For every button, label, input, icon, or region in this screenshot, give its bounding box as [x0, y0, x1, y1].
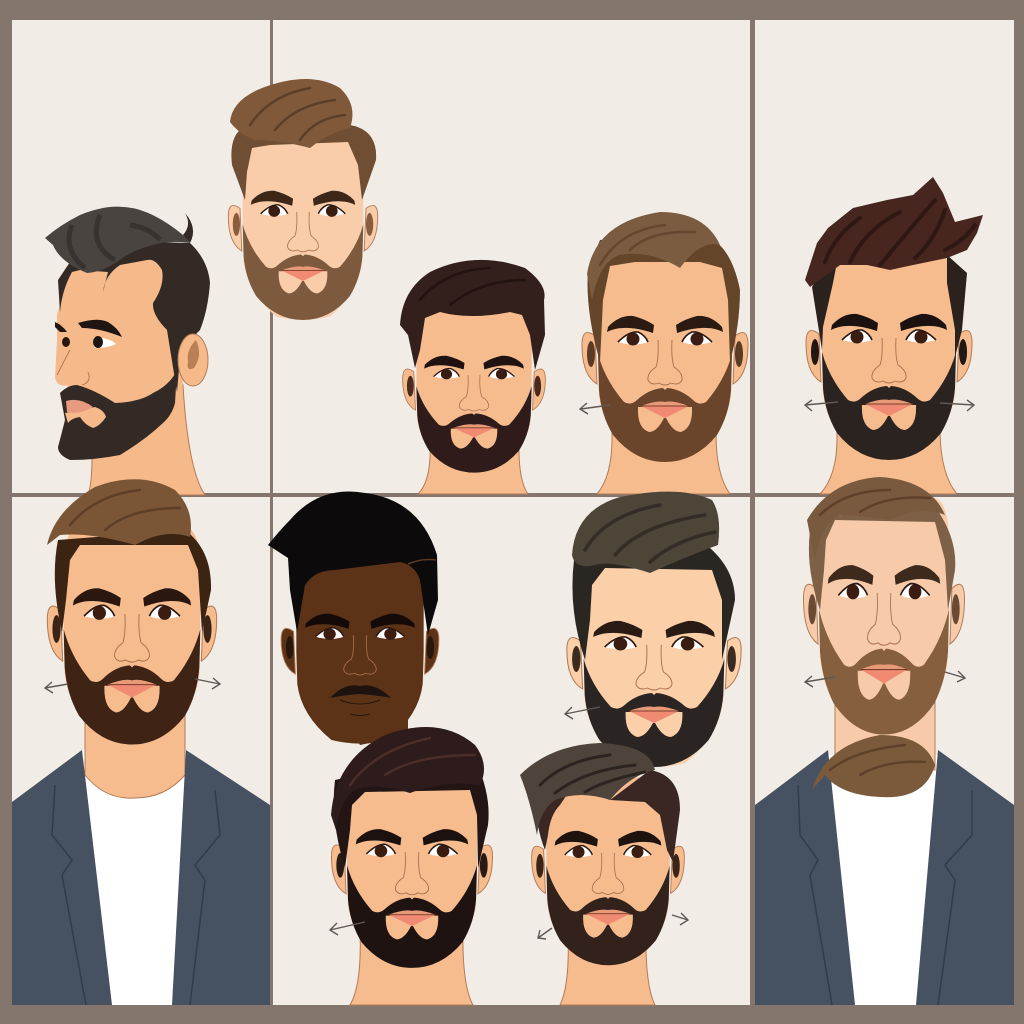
panel: bottom right: [755, 497, 1014, 1005]
hair swatch: [812, 735, 935, 797]
arrow: [565, 707, 600, 719]
hair: swept grey quiff: [572, 492, 719, 573]
hair: brown quiff: [230, 79, 352, 148]
arrows: [805, 400, 974, 411]
portrait: blazer with long brown beard: [755, 477, 1014, 1005]
hair: black voluminous: [268, 492, 438, 635]
blazer and shirt: [12, 715, 270, 1005]
portrait: man in blazer with brown hair and dark beard: [12, 479, 270, 1005]
portrait: dark skin with black hair and moustache: [268, 492, 439, 745]
hair: swept grey quiff: [45, 207, 193, 273]
hair: dark crop: [400, 260, 545, 370]
panel: bottom centre: [273, 497, 750, 1005]
portrait: striped grey hair with short beard and arrows: [520, 743, 688, 1005]
arrows: [45, 678, 220, 693]
portrait: short brown hair with tapered beard: [228, 79, 378, 320]
arrows: [538, 913, 688, 939]
hair: striped quiff: [520, 743, 655, 835]
blazer and shirt: [755, 700, 1014, 1005]
arrow: [580, 403, 610, 414]
ear: [178, 334, 208, 386]
panel: top right: [755, 20, 1014, 493]
hair: brown quiff: [587, 212, 720, 300]
portrait: profile with dark hair and full beard: [45, 207, 210, 495]
panel: top left: [12, 20, 270, 493]
hair: brown quiff: [47, 479, 191, 545]
panel: top centre: [273, 20, 750, 493]
arrow: [330, 922, 365, 935]
moustache: [330, 685, 391, 698]
hair: swept spikes: [805, 177, 983, 287]
portrait: grey quiff with dark beard and arrow: [565, 492, 741, 767]
portrait: dark hair with black full beard and arrow: [330, 727, 493, 1005]
portrait: dark hair with short beard: [400, 260, 545, 494]
portrait: brown hair with wide beard and arrow: [580, 212, 748, 494]
hair: dark quiff: [331, 727, 484, 830]
beard: [58, 370, 177, 460]
arrows: [805, 671, 965, 687]
portrait: spiked dark hair with black beard and arrows: [805, 177, 983, 494]
hair: swept brown: [807, 477, 945, 560]
panel: bottom left: [12, 497, 270, 1005]
